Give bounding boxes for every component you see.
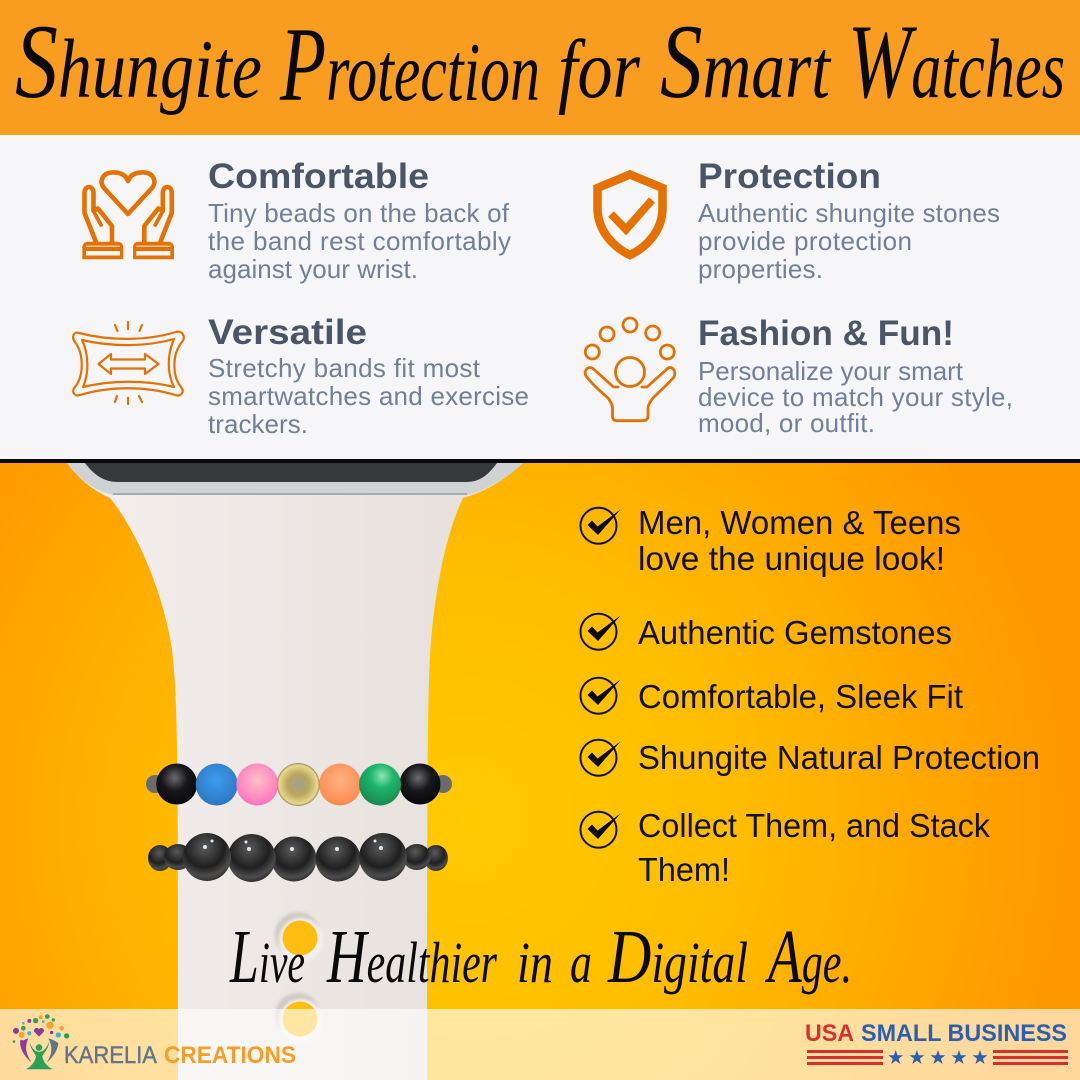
checklist: Shungite Natural Protection xyxy=(638,739,1040,776)
checklist: Authentic Gemstones xyxy=(638,614,952,651)
logo: Karelia Creations: KARELIA xyxy=(64,1042,157,1069)
text: Protection body: provide protection xyxy=(698,226,912,256)
text: Comfortable body: against your wrist. xyxy=(208,254,418,284)
icon: person juggling xyxy=(585,318,675,421)
footer band xyxy=(0,1009,1080,1080)
badge: USA small business: SMALL BUSINESS xyxy=(861,1020,1067,1047)
text: Fashion body: device to match your style, xyxy=(698,382,1013,412)
text: Protection body: Authentic shungite stones xyxy=(698,198,1000,228)
text: Protection body: properties. xyxy=(698,254,823,284)
logo: Karelia Creations xyxy=(13,1014,296,1069)
heading: Protection: Protection xyxy=(698,157,881,196)
title: Smart xyxy=(660,3,832,120)
checklist: Men, Women & Teens xyxy=(638,504,961,541)
text: Fashion body: mood, or outfit. xyxy=(698,408,875,438)
orange background xyxy=(0,463,1080,1080)
badge: USA small business xyxy=(805,1020,1068,1065)
features panel xyxy=(0,135,1080,463)
icon: stretch pillow xyxy=(73,322,184,404)
checklist xyxy=(580,504,1040,888)
tagline: a xyxy=(570,930,592,995)
text: Versatile body xyxy=(208,353,529,439)
heading: Versatile: Versatile xyxy=(208,313,367,352)
text: Comfortable body xyxy=(208,198,511,284)
icon: hands holding heart xyxy=(82,172,174,259)
tagline: Healthier xyxy=(326,915,497,999)
text: Versatile body: trackers. xyxy=(208,409,308,439)
icon: shield with check xyxy=(598,174,662,255)
tagline: Digital xyxy=(607,915,748,999)
checklist: Them! xyxy=(638,851,730,888)
heading: Fashion & Fun!: Fashion & Fun! xyxy=(698,314,954,353)
tagline: Age. xyxy=(764,915,852,999)
text: Fashion body: Personalize your smart xyxy=(698,356,964,386)
shungite bead bracelet xyxy=(148,833,448,882)
tagline xyxy=(229,915,852,999)
logo: Karelia Creations: CREATIONS xyxy=(164,1042,296,1069)
title: Protection xyxy=(279,6,540,123)
text: Protection body xyxy=(698,198,1000,284)
tagline: Live xyxy=(229,915,305,999)
checklist: Comfortable, Sleek Fit xyxy=(638,678,963,715)
tagline: in xyxy=(517,930,553,995)
title xyxy=(15,3,1065,123)
title: Shungite xyxy=(15,3,262,120)
badge: USA small business: USA xyxy=(805,1020,854,1047)
text: Versatile body: smartwatches and exercise xyxy=(208,381,529,411)
text: Versatile body: Stretchy bands fit most xyxy=(208,353,481,383)
text: Comfortable body: Tiny beads on the back of xyxy=(208,198,510,228)
title: for xyxy=(558,23,640,116)
header band xyxy=(0,0,1080,135)
text: Fashion body xyxy=(698,356,1013,438)
colored bead bracelet xyxy=(146,763,452,806)
checklist: love the unique look! xyxy=(638,540,945,577)
text: Comfortable body: the band rest comfortably xyxy=(208,226,511,256)
checklist: Collect Them, and Stack xyxy=(638,807,990,844)
watch band photo xyxy=(67,463,523,1080)
heading: Comfortable: Comfortable xyxy=(208,157,429,196)
